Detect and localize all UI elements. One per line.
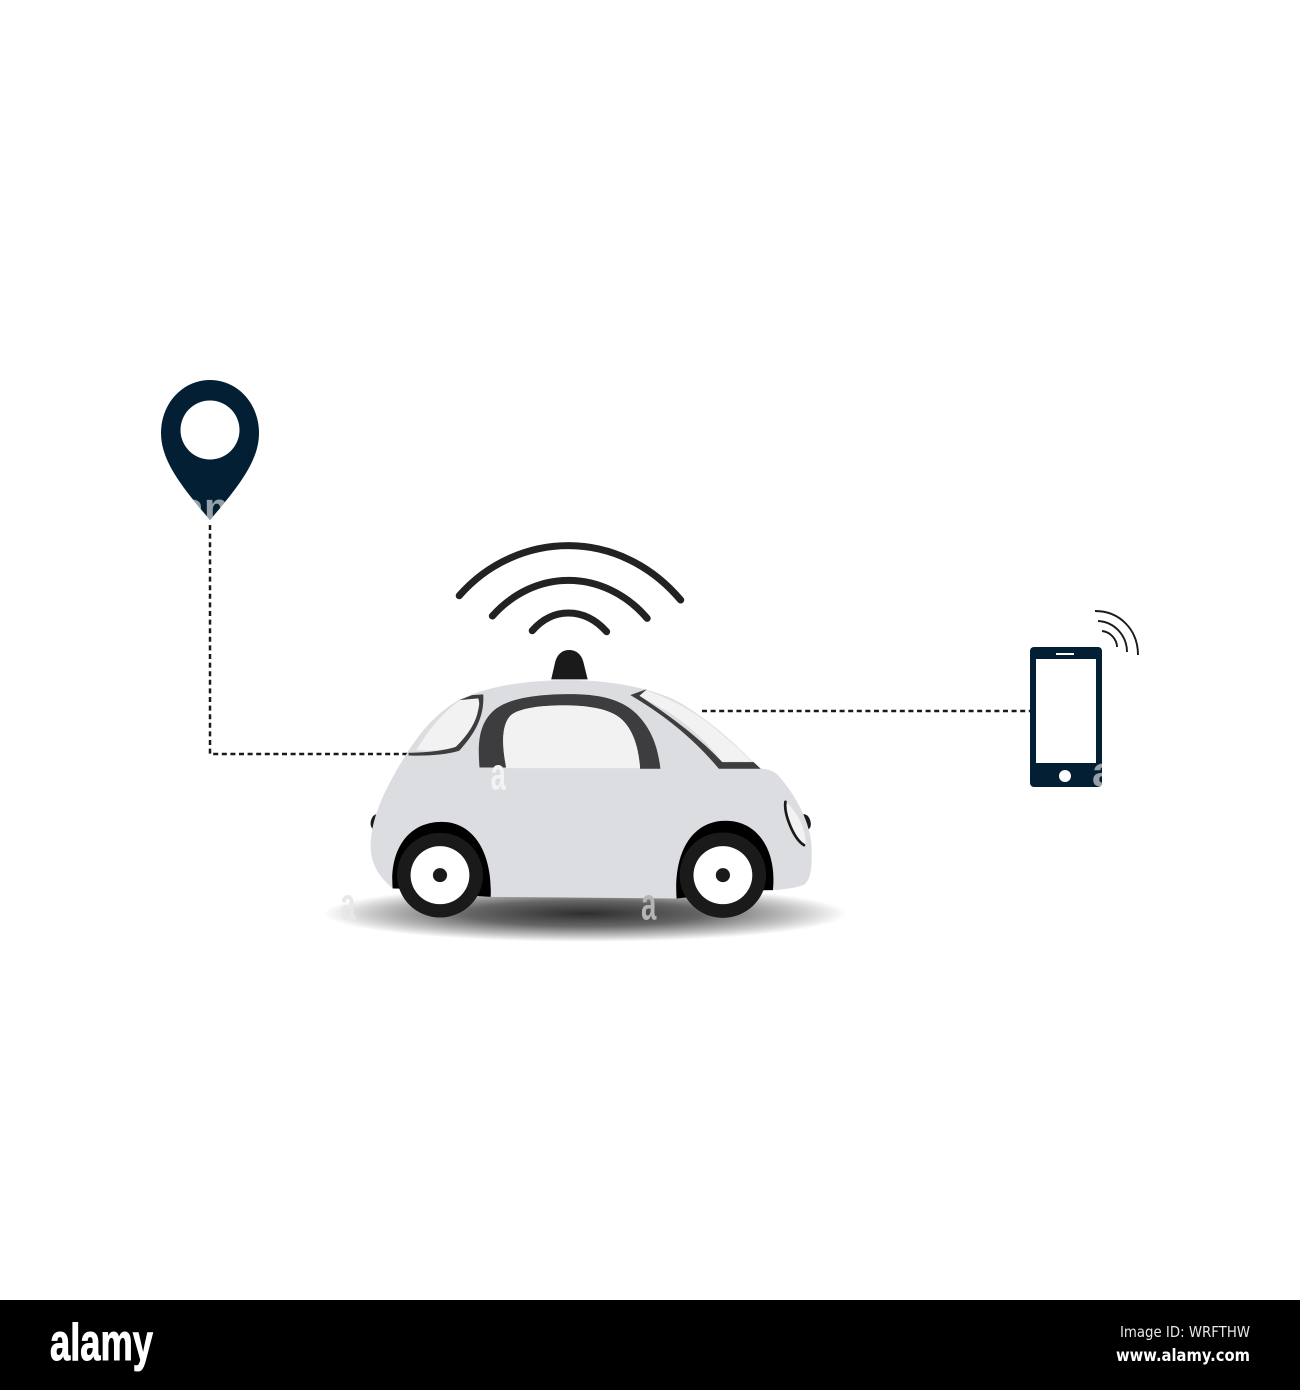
front wheel arch [676,821,773,899]
dashed route: pin to car [210,525,408,754]
image id: Image ID: WRFTHW [1120,1323,1250,1341]
icon: phone signal waves [1095,611,1138,655]
website: www.alamy.com [1116,1346,1250,1365]
icon: smartphone [1030,647,1102,787]
wifi signal arcs [459,546,681,632]
front wheel [680,832,766,918]
car illustration [323,546,847,942]
door window glass [503,705,640,768]
rear window [416,697,479,750]
watermark letters: a [491,749,506,799]
car body [371,680,812,899]
rear wheel [397,833,483,918]
watermark letters [340,749,657,929]
rear wheel arch [392,822,491,897]
watermark letters: a [641,879,657,929]
roof sensor beacon [551,650,588,679]
footer logo: alamy [50,1314,153,1372]
headlight [785,802,805,845]
windshield glass [639,691,752,762]
bumpers [371,814,377,830]
watermark letters: a [340,879,356,929]
car shadow [323,885,847,942]
icon: smartphone: a [1092,748,1116,795]
dashed link: car to phone [702,710,1030,712]
icon: location pin [161,380,259,530]
footer bar [0,1300,1300,1390]
door window frame [479,694,660,769]
windshield frame [630,689,761,769]
icon: location pin: am [180,486,242,530]
